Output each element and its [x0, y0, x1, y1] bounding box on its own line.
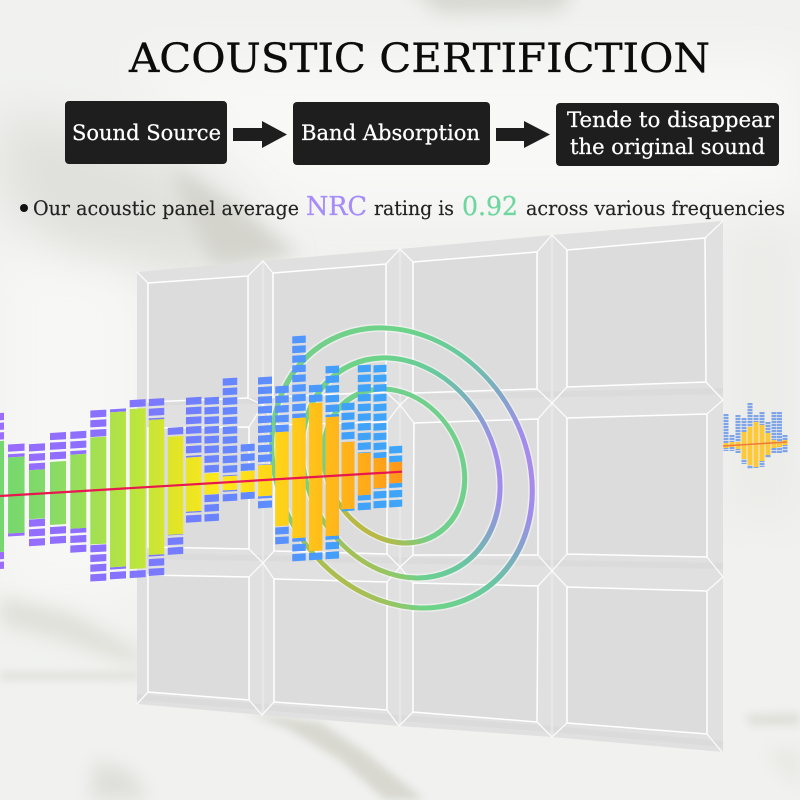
ring: inner: [314, 387, 474, 545]
step: sound disappears: the original sound: [570, 135, 765, 160]
title: ACOUSTIC CERTIFICTION: [128, 36, 710, 82]
NRC rating statement: 0.92: [462, 191, 518, 222]
arrow: absorption to result: [496, 121, 550, 148]
step: sound source: Sound Source: [72, 121, 221, 146]
NRC rating statement: Our acoustic panel average: [33, 196, 299, 220]
step: sound source: [65, 101, 227, 164]
incoming sound equalizer bars: [0, 330, 396, 587]
arrow: source to absorption: [233, 121, 287, 148]
concentric sound rings: [255, 325, 549, 611]
NRC rating statement: across various frequencies: [526, 196, 785, 220]
ring: outer: [255, 325, 549, 611]
waveform line: [0, 472, 402, 496]
step: sound disappears: [556, 103, 779, 166]
step: band absorption: Band Absorption: [301, 121, 480, 146]
ring: middle: [289, 355, 513, 580]
flow diagram: [65, 101, 779, 166]
residual sound small equalizer: [723, 403, 787, 469]
NRC rating statement: [20, 191, 785, 222]
step: sound disappears: Tende to disappear: [567, 108, 775, 133]
NRC rating statement: rating is: [374, 196, 454, 220]
NRC rating statement: NRC: [306, 191, 367, 222]
acoustic panel wall: [137, 221, 723, 752]
step: band absorption: [293, 102, 490, 165]
